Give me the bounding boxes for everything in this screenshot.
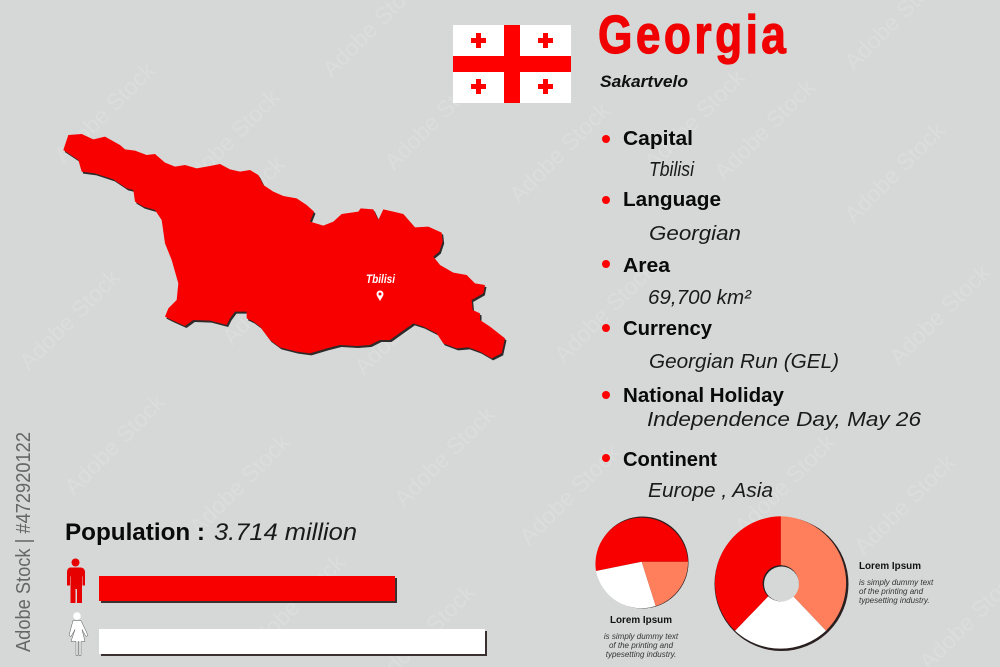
- text: Adobe Stock: [839, 117, 950, 228]
- fact: area: [602, 255, 752, 309]
- text: Adobe Stock: [14, 264, 125, 375]
- fact: national holiday: [602, 385, 922, 431]
- text: Adobe Stock: [184, 429, 295, 540]
- fact: area: 69,700 km²: [648, 287, 752, 309]
- fact: national holiday: Independence Day, May 26: [647, 409, 922, 431]
- text: Adobe Stock: [217, 239, 328, 350]
- donut caption: large: [859, 561, 934, 605]
- fact: continent: Continent: [623, 449, 717, 471]
- donut caption: large: of the printing and: [859, 587, 924, 596]
- population heading: 3.714 million: [214, 519, 357, 546]
- population heading: [65, 519, 357, 546]
- text: Adobe Stock: [514, 439, 625, 550]
- text: Adobe Stock: [239, 549, 350, 660]
- title: Georgia: [598, 5, 789, 65]
- icon: female figure: [69, 612, 88, 656]
- fact: currency: Georgian Run (GEL): [649, 351, 839, 373]
- text: Adobe Stock: [49, 57, 160, 168]
- bar: male population: [99, 576, 397, 603]
- icon: map pin: [376, 290, 384, 301]
- text: Adobe Stock: [379, 64, 490, 175]
- fact: currency: [602, 318, 839, 373]
- text: Adobe Stock: [504, 97, 615, 208]
- fact: capital: Capital: [623, 128, 693, 150]
- subtitle: Sakartvelo: [600, 72, 688, 91]
- map of Georgia: [63, 134, 506, 360]
- fact: national holiday: National Holiday: [623, 385, 785, 407]
- donut caption: large: is simply dummy text: [859, 578, 934, 587]
- text: Adobe Stock: [709, 74, 820, 185]
- pie caption: small: [604, 615, 679, 659]
- text: Adobe Stock: [884, 259, 995, 370]
- stock id label: Adobe Stock | #472920122: [13, 432, 35, 652]
- text: Adobe Stock: [179, 151, 290, 262]
- population heading: Population :: [65, 519, 205, 546]
- text: Adobe Stock: [389, 401, 500, 512]
- icon: male figure: [67, 558, 85, 603]
- pie caption: small: is simply dummy text: [604, 632, 679, 641]
- pie caption: small: of the printing and: [609, 641, 674, 650]
- donut caption: large: Lorem Ipsum: [859, 561, 921, 572]
- donut chart: large: [714, 516, 848, 651]
- map label: Tbilisi: Tbilisi: [366, 272, 396, 286]
- fact: continent: Europe , Asia: [648, 480, 773, 502]
- fact: currency: Currency: [623, 318, 713, 340]
- pie chart: small: [595, 516, 688, 608]
- bar: female population: [99, 629, 487, 656]
- text: Adobe Stock: [849, 449, 960, 560]
- pie caption: small: typesetting industry.: [606, 650, 676, 659]
- pie caption: small: Lorem Ipsum: [610, 615, 672, 626]
- fact: capital: Tbilisi: [649, 159, 694, 181]
- text: Adobe Stock: [174, 84, 285, 195]
- icon: flag of Georgia: [453, 25, 571, 103]
- text: Adobe Stock: [729, 429, 840, 540]
- text: Adobe Stock: [59, 389, 170, 500]
- fact: capital: [602, 128, 694, 181]
- fact: language: [602, 189, 741, 245]
- fact: language: Georgian: [649, 223, 741, 245]
- facts list: [602, 128, 922, 502]
- donut caption: large: typesetting industry.: [859, 596, 930, 605]
- fact: continent: [602, 449, 773, 502]
- text: Adobe Stock: [349, 269, 460, 380]
- fact: language: Language: [623, 189, 721, 211]
- text: Adobe Stock: [639, 64, 750, 175]
- text: Adobe Stock: [549, 257, 660, 368]
- fact: area: Area: [623, 255, 671, 277]
